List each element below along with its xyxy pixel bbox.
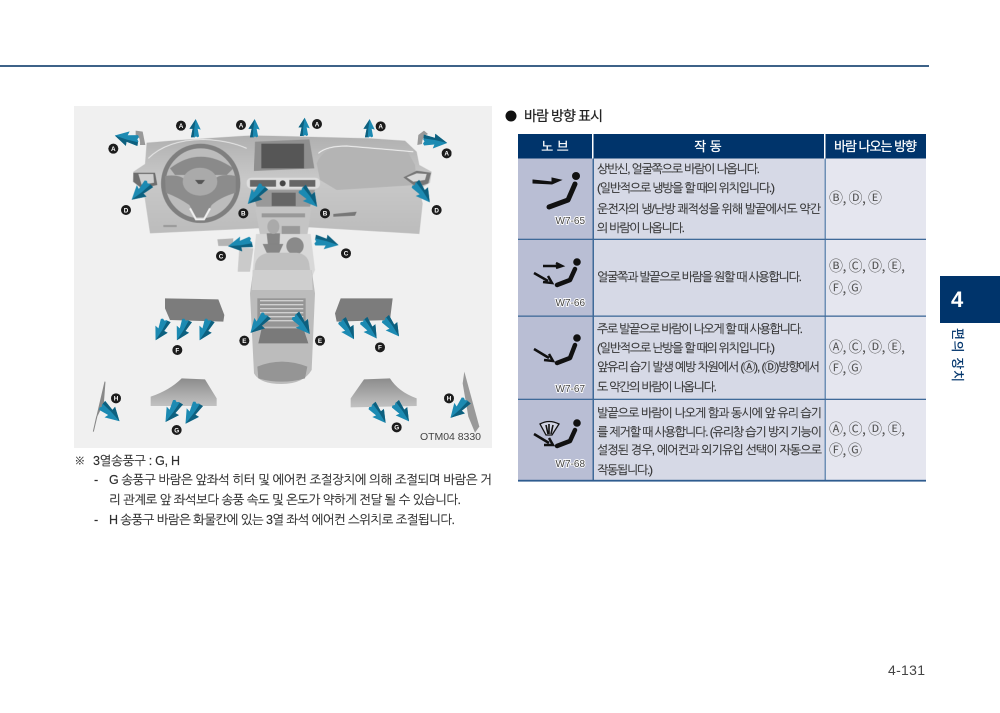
letter badges: front — [108, 119, 452, 261]
letter badges: front: B — [323, 211, 328, 218]
text block: third-row vent note: - — [94, 473, 98, 487]
row 3: foot vents: Ⓕ, Ⓖ — [829, 358, 862, 378]
infotainment screen — [254, 139, 314, 171]
icon: seat with defrost and foot airflow — [534, 419, 581, 446]
letter badges: front: A — [378, 124, 383, 131]
row 4: foot and defrost: Ⓐ, Ⓒ, Ⓓ, Ⓔ, — [829, 419, 905, 439]
row 2: face and foot vents: Ⓑ, Ⓒ, Ⓓ, Ⓔ, — [829, 256, 905, 276]
text block: third-row vent note: 3열송풍구 : G, H — [93, 454, 180, 468]
figure code: OTM04 8330 — [420, 431, 481, 443]
letter badges: front: A — [111, 146, 116, 153]
letter badges: rear: F — [378, 345, 382, 352]
row 1: face vents: 의 바람이 나옵니다. — [597, 221, 685, 235]
letter badges: front: A — [444, 151, 449, 158]
letter badges: rear: E — [242, 338, 246, 345]
row 1: face vents: 상반신, 얼굴쪽으로 바람이 나옵니다. — [597, 162, 760, 176]
row 4: foot and defrost: W7-68 — [556, 459, 585, 470]
page number: 4-131 — [888, 662, 925, 678]
steering wheel — [163, 146, 238, 221]
text block: third-row vent note: G 송풍구 바람은 앞좌석 히터 및 에어컨 조절장치에 의해 조절되며 바람은 거 — [109, 473, 492, 487]
header rule — [0, 65, 929, 67]
row 4: foot and defrost — [534, 406, 905, 477]
row 3: foot vents: 앞유리 습기 발생 예방 차원에서 (Ⓐ), (Ⓓ)방향에서 — [597, 360, 820, 374]
table: knob positions — [518, 134, 926, 482]
letter badges: front: C — [344, 251, 349, 258]
icon: seat with face airflow — [533, 172, 580, 207]
text block: third-row vent note: ※ — [74, 454, 86, 468]
letter badges: front: B — [241, 211, 246, 218]
row 4: foot and defrost: 작동됩니다.) — [597, 463, 653, 477]
row 2: face and foot vents — [534, 256, 905, 309]
letter badges: front: D — [434, 207, 439, 214]
letter badges: rear: F — [175, 347, 179, 354]
row 3: foot vents: W7-67 — [556, 384, 585, 395]
letter badges: rear — [111, 336, 454, 435]
text block: third-row vent note: - — [94, 513, 98, 527]
row 2: face and foot vents: 얼굴쪽과 발끝으로 바람을 원할 때 사용합니다. — [597, 270, 802, 284]
center vents — [247, 178, 320, 189]
letter badges: front: A — [239, 122, 244, 129]
text block: third-row vent note: 리 관계로 앞 좌석보다 송풍 속도 및 온도가 약하게 전달 될 수 있습니다. — [109, 493, 461, 507]
row 1: face vents: 운전자의 냉/난방 쾌적성을 위해 발끝에서도 약간 — [597, 202, 821, 216]
rear console — [250, 270, 315, 384]
row 2: face and foot vents: W7-66 — [556, 298, 585, 309]
row 1: face vents: Ⓑ, Ⓓ, Ⓔ — [829, 188, 882, 208]
row 1: face vents: W7-65 — [556, 216, 585, 227]
icon: seat with face and foot airflow — [534, 258, 581, 285]
panel: air vent illustration — [74, 106, 492, 448]
row 4: foot and defrost: 설정된 경우, 에어컨과 외기유입 선택이 자동으로 — [597, 443, 822, 457]
table column backgrounds — [518, 158, 926, 482]
heading: wind direction display: 바람 방향 표시 — [524, 108, 603, 124]
table header — [518, 134, 926, 158]
row 1: face vents — [533, 162, 882, 235]
letter badges: front: A — [179, 123, 184, 130]
letter badges: rear: H — [447, 396, 452, 403]
row 3: foot vents: (일반적으로 난방을 할 때의 위치입니다.) — [597, 341, 775, 355]
dashboard illustration — [108, 118, 452, 282]
letter badges: front: C — [219, 253, 224, 260]
table header: 작 동 — [694, 139, 722, 154]
arrows: rear vents — [97, 310, 472, 428]
icon: seat with foot airflow — [534, 334, 581, 363]
row 3: foot vents — [534, 322, 905, 395]
chapter tab: 4 — [951, 287, 964, 312]
letter badges: rear: G — [174, 427, 179, 434]
center controls — [163, 190, 357, 235]
chapter tab — [940, 276, 1000, 323]
row 4: foot and defrost: 발끝으로 바람이 나오게 함과 동시에 앞 유리 습기 — [597, 406, 822, 420]
rear vents illustration — [93, 270, 479, 435]
arrows: front vents — [113, 118, 448, 254]
floor console — [217, 219, 315, 282]
table header: 노 브 — [541, 139, 569, 154]
row 3: foot vents: 주로 발끝으로 바람이 나오게 할 때 사용합니다. — [597, 322, 803, 336]
row 2: face and foot vents: Ⓕ, Ⓖ — [829, 278, 862, 298]
row 4: foot and defrost: Ⓕ, Ⓖ — [829, 440, 862, 460]
row 1: face vents: (일반적으로 냉방을 할 때의 위치입니다.) — [597, 181, 775, 195]
letter badges: rear: E — [318, 338, 322, 345]
text block: third-row vent note: H 송풍구 바람은 화물칸에 있는 3열 좌석 에어컨 스위치로 조절됩니다. — [109, 513, 455, 527]
row 3: foot vents: 도 약간의 바람이 나옵니다. — [597, 380, 717, 394]
rear side ducts — [93, 298, 479, 433]
letter badges: rear: H — [114, 396, 119, 403]
row 4: foot and defrost: 를 제거할 때 사용합니다. (유리창 습기 방지 기능이 — [597, 425, 822, 439]
table header: 바람 나오는 방향 — [834, 139, 917, 154]
text block: third-row vent note — [74, 454, 492, 527]
letter badges: rear: G — [394, 425, 399, 432]
letter badges: front: A — [315, 121, 320, 128]
row 3: foot vents: Ⓐ, Ⓒ, Ⓓ, Ⓔ, — [829, 337, 905, 357]
chapter title: 편의 장치 — [950, 328, 965, 382]
letter badges: front: D — [124, 207, 129, 214]
